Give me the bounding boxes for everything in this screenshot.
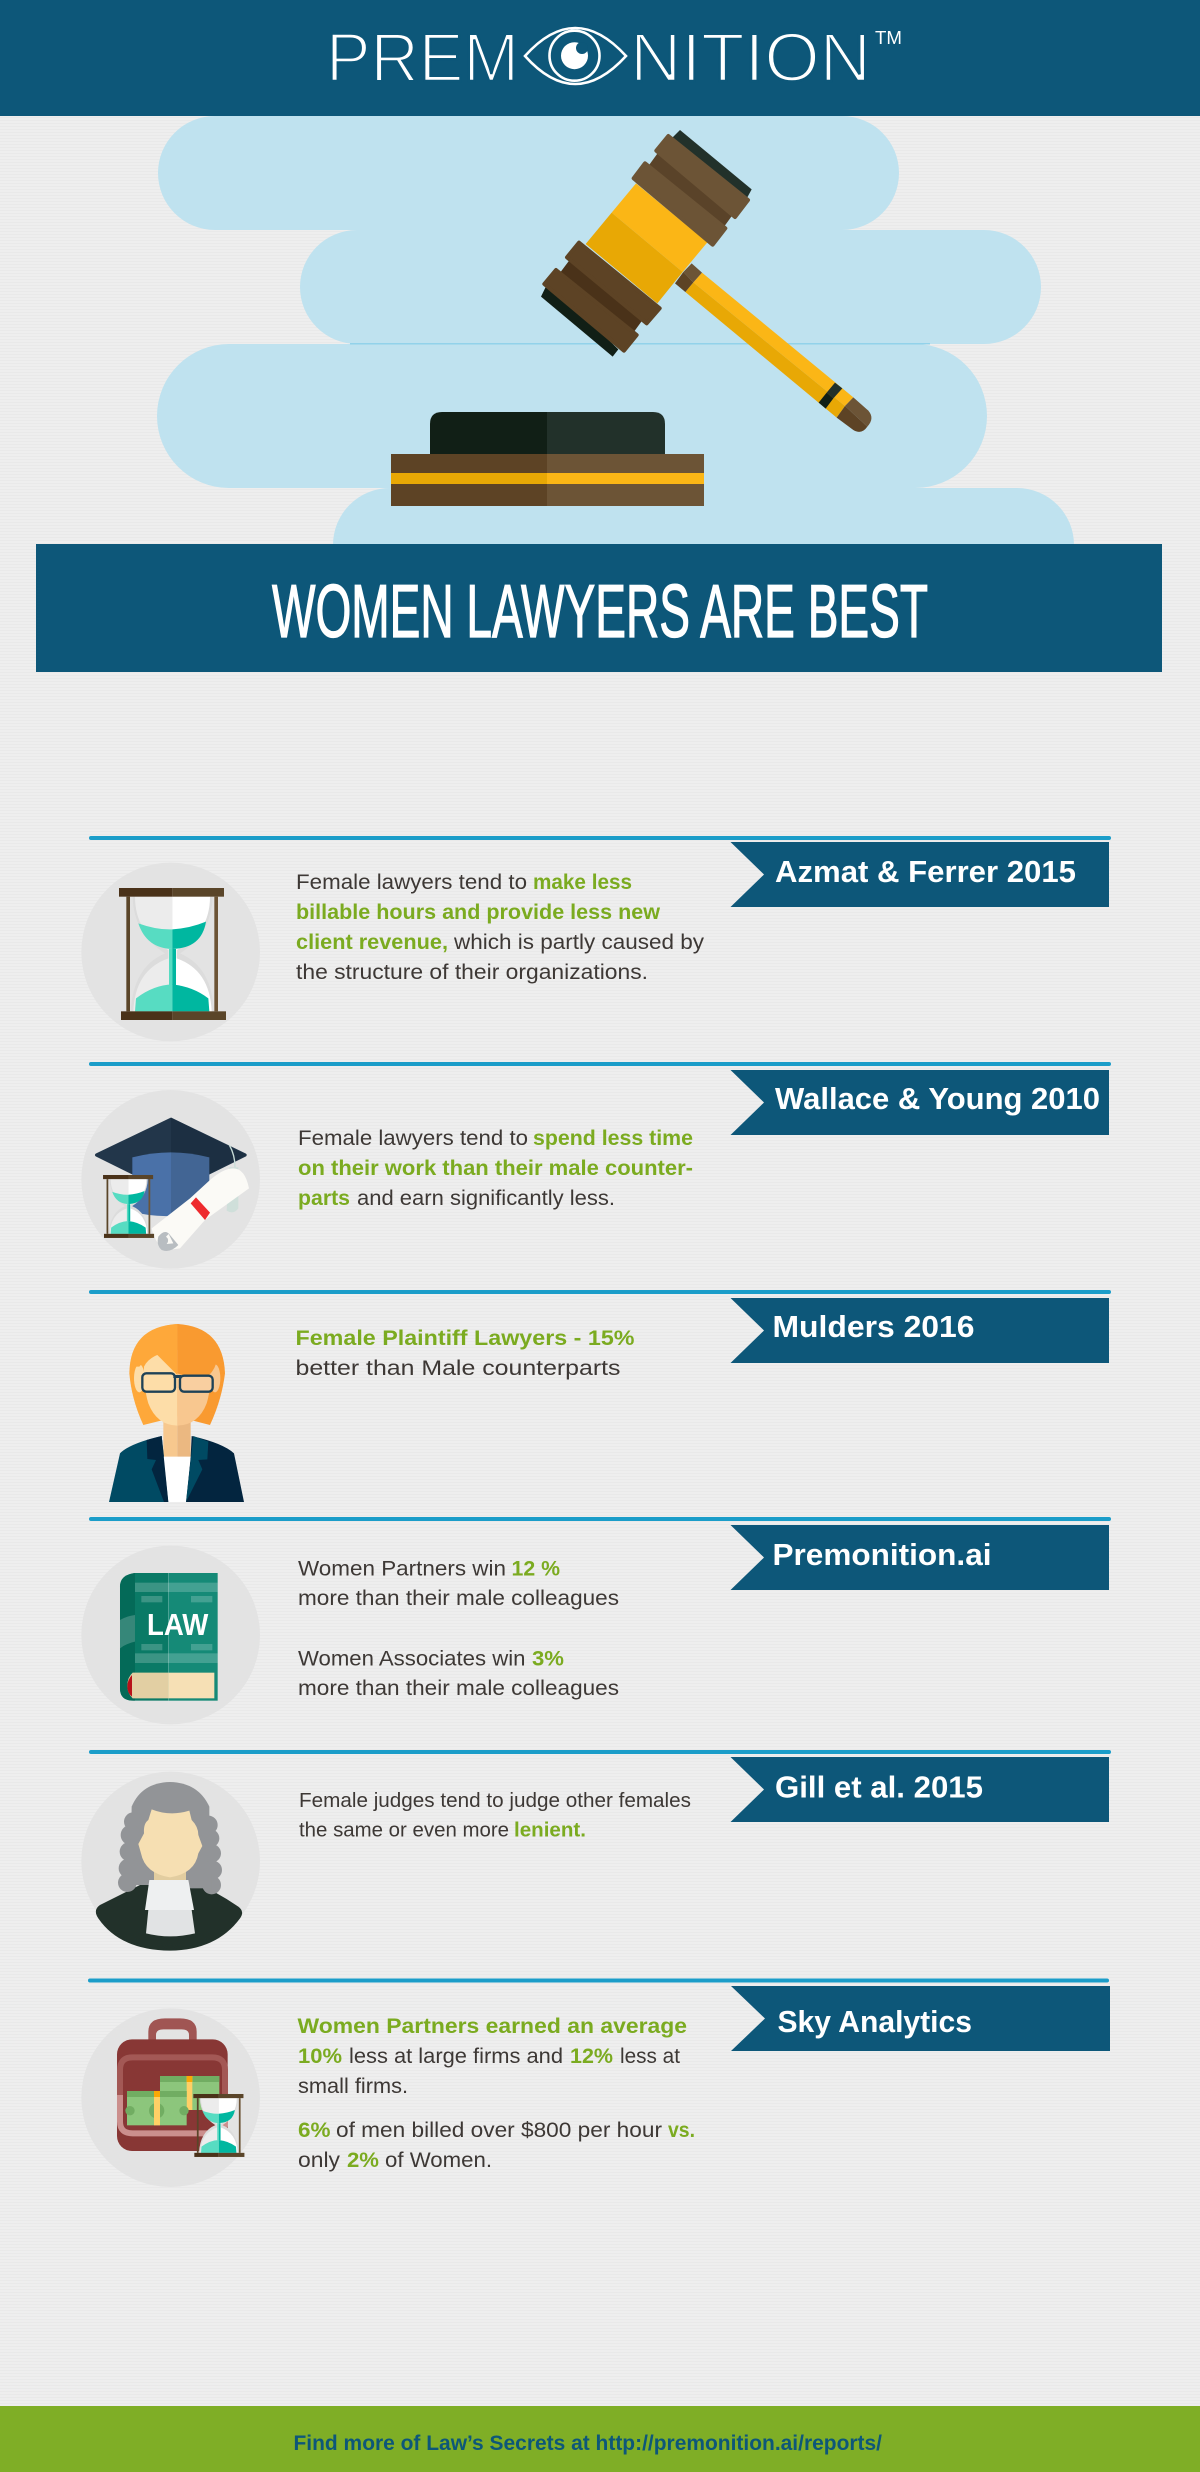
clouds background [157,116,1074,602]
text: Azmat & Ferrer findings: the structure of their organizations. [296,960,648,984]
text: Mulders findings [296,1326,634,1380]
text: Azmat & Ferrer findings: billable hours and provide less new [296,900,660,924]
text: Premonition findings: 3% [532,1646,564,1670]
text: Azmat & Ferrer findings [296,870,704,984]
icon: gavel [541,130,871,432]
banner: Mulders: Mulders 2016 [772,1309,974,1344]
text: Sky Analytics findings: 2% [347,2148,379,2172]
icon: law book: LAW [147,1608,208,1642]
text: Azmat & Ferrer findings: make less [533,870,632,894]
footer text: Find more of Law’s Secrets at http://premonition.ai/reports/ [294,2432,882,2455]
panel: Azmat & Ferrer 2015 [81,836,1111,1041]
panel: Gill et al. 2015 [81,1750,1111,1951]
text: Premonition findings: more than their male colleagues [298,1676,619,1700]
text: Wallace & Young findings: on their work than their male counter- [298,1156,693,1180]
logo: Premonition: PREM [326,19,519,96]
banner: Premonition.ai: Premonition.ai [772,1537,992,1572]
text: Azmat & Ferrer findings: which is partly caused by [453,930,704,954]
text: Sky Analytics findings: small firms. [298,2074,408,2098]
text: Sky Analytics findings: vs. [668,2118,695,2142]
text: Mulders findings: better than Male counterparts [296,1356,620,1380]
icon: graduation cap, diploma and hourglass [81,1090,260,1269]
text: Azmat & Ferrer findings: Female lawyers tend to [296,870,527,894]
icon: gavel block [391,412,704,506]
panel: Premonition.ai [81,1517,1111,1724]
text: Sky Analytics findings: less at [620,2044,680,2068]
text: Wallace & Young findings: parts [298,1186,350,1210]
banner: Wallace & Young [730,1070,1109,1135]
text: Sky Analytics findings: only [298,2148,340,2172]
footer bar [0,2406,1200,2472]
text: Mulders findings: Female Plaintiff Lawyers - 15% [296,1326,634,1350]
text: Sky Analytics findings [298,2014,695,2172]
text: Sky Analytics findings: of Women. [385,2148,492,2172]
text: Sky Analytics findings: of men billed over $800 per hour [336,2118,662,2142]
panel: Sky Analytics [81,1978,1110,2187]
icon: briefcase with money and hourglass [81,2008,260,2187]
logo: Premonition: NITION [630,19,871,96]
icon: judge with wig [81,1772,260,1951]
text: Premonition findings: Women Associates win [298,1646,526,1670]
icon: woman lawyer [109,1324,244,1502]
logo: Premonition [326,19,902,96]
text: Premonition findings [298,1556,619,1700]
banner: Sky Analytics [731,1986,1110,2051]
banner: Gill et al. [730,1757,1109,1822]
text: Azmat & Ferrer findings: client revenue, [296,930,448,954]
banner: Gill et al.: Gill et al. 2015 [775,1770,983,1804]
text: Sky Analytics findings: less at large firms and [349,2044,563,2068]
logo: Premonition: TM [875,28,902,48]
text: Gill et al. findings: Female judges tend to judge other females [299,1789,691,1812]
text: Sky Analytics findings: 10% [298,2044,342,2068]
text: Wallace & Young findings [298,1126,693,1210]
text: Sky Analytics findings: 6% [298,2118,330,2142]
icon: hourglass [81,863,260,1041]
panel: Wallace & Young 2010 [81,1062,1111,1269]
text: Wallace & Young findings: spend less time [533,1126,693,1150]
banner: Wallace & Young: Wallace & Young 2010 [775,1081,1100,1116]
text: Gill et al. findings [299,1789,691,1842]
text: Gill et al. findings: the same or even more [299,1818,509,1842]
text: Wallace & Young findings: and earn significantly less. [357,1186,615,1210]
banner: Sky Analytics: Sky Analytics [778,2004,972,2039]
text: Gill et al. findings: lenient. [514,1818,586,1842]
icon: law book [81,1546,260,1724]
banner: Premonition.ai [730,1525,1109,1590]
text: Premonition findings: 12 % [512,1556,560,1580]
title banner [36,544,1162,672]
banner: Azmat & Ferrer [730,842,1109,907]
text: Sky Analytics findings: Women Partners earned an average [298,2014,687,2038]
banner: Mulders [730,1298,1109,1363]
text: Wallace & Young findings: Female lawyers tend to [298,1126,528,1150]
text: Sky Analytics findings: 12% [570,2044,613,2068]
text: Premonition findings: more than their male colleagues [298,1586,619,1610]
panel: Mulders 2016 [89,1290,1111,1502]
banner: Azmat & Ferrer: Azmat & Ferrer 2015 [775,854,1076,889]
text: Premonition findings: Women Partners win [298,1556,506,1580]
header bar [0,0,1200,116]
